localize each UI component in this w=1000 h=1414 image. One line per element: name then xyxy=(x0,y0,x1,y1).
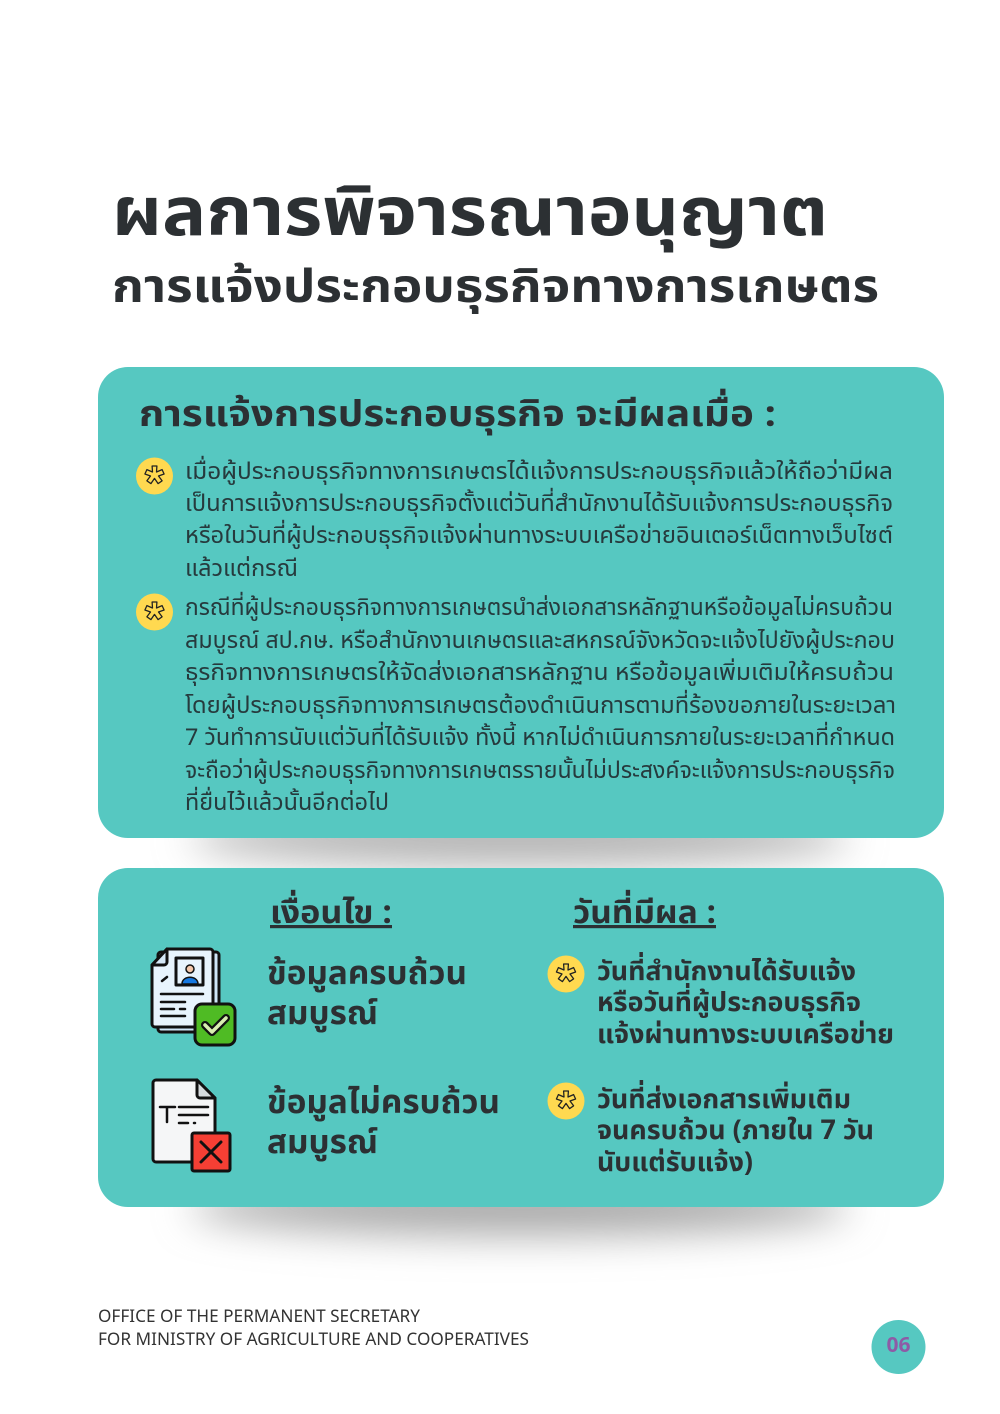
footer text: OFFICE OF THE PERMANENT SECRETARY xyxy=(98,1304,420,1330)
label: incomplete: ข้อมูลไม่ครบถ้วน xyxy=(267,1078,500,1128)
text block: date 2 xyxy=(597,1080,874,1184)
text block: date 2: วันที่ส่งเอกสารเพิ่มเติม xyxy=(597,1080,851,1121)
text block: paragraph 1: แล้วแต่กรณี xyxy=(185,553,298,587)
heading: effective date: วันที่มีผล : xyxy=(573,889,716,938)
icon: star bullet 3 xyxy=(548,956,584,992)
text block: paragraph 2: ธุรกิจทางการเกษตรให้จัดส่งเอกสารหลักฐาน หรือข้อมูลเพิ่มเติมให้ครบถ้วน xyxy=(185,657,894,691)
icon: star bullet 4 xyxy=(548,1082,584,1120)
panel: conditions and dates xyxy=(98,868,944,1207)
label: complete: ข้อมูลครบถ้วน xyxy=(267,949,467,999)
text block: date 1: แจ้งผ่านทางระบบเครือข่าย xyxy=(597,1015,894,1056)
text block: paragraph 2: 7 วันทำการนับแต่วันที่ได้รับแจ้ง ทั้งนี้ หากไม่ดำเนินการภายในระยะเวลาที่กำหนด xyxy=(185,721,895,756)
panel shadow xyxy=(190,1179,850,1235)
text block: paragraph 2: สมบูรณ์ สป.กษ. หรือสำนักงานเกษตรและสหกรณ์จังหวัดจะแจ้งไปยังผู้ประกอบ xyxy=(185,625,895,659)
footer text xyxy=(98,1304,529,1353)
text block: date 2: นับแต่รับแจ้ง) xyxy=(597,1143,753,1184)
footer text: FOR MINISTRY OF AGRICULTURE AND COOPERATIVES xyxy=(98,1327,529,1353)
text block: paragraph 1: เป็นการแจ้งการประกอบธุรกิจตั้งแต่วันที่สำนักงานได้รับแจ้งการประกอบธุรกิจ xyxy=(185,487,893,522)
panel shadow xyxy=(190,811,850,865)
text block: paragraph 2: โดยผู้ประกอบธุรกิจทางการเกษตรต้องดำเนินการตามที่ร้องขอภายในระยะเวลา xyxy=(185,689,896,724)
title: ผลการพิจารณาอนุญาต xyxy=(112,163,828,266)
icon: star bullet 2 xyxy=(136,594,173,630)
text block: paragraph 2: ที่ยื่นไว้แล้วนั้นอีกต่อไป xyxy=(185,786,389,821)
icon: incomplete document xyxy=(153,1080,230,1171)
text block: paragraph 2 xyxy=(185,591,896,821)
text block: paragraph 1: เมื่อผู้ประกอบธุรกิจทางการเกษตรได้แจ้งการประกอบธุรกิจแล้วให้ถือว่ามีผล xyxy=(185,455,893,490)
panel heading: การแจ้งการประกอบธุรกิจ จะมีผลเมื่อ : xyxy=(139,388,776,443)
text block: paragraph 2: กรณีที่ผู้ประกอบธุรกิจทางการเกษตรนำส่งเอกสารหลักฐานหรือข้อมูลไม่ครบถ้วน xyxy=(185,591,893,626)
icon: complete document xyxy=(152,949,235,1045)
text block: date 1: หรือวันที่ผู้ประกอบธุรกิจ xyxy=(597,983,861,1024)
label: incomplete xyxy=(267,1078,500,1168)
subtitle: การแจ้งประกอบธุรกิจทางการเกษตร xyxy=(112,253,879,323)
label: complete xyxy=(267,949,467,1039)
page number badge: 06 xyxy=(886,1331,911,1362)
panel: effective when xyxy=(98,367,944,838)
label: incomplete: สมบูรณ์ xyxy=(267,1118,378,1168)
page number badge xyxy=(872,1320,926,1374)
label: complete: สมบูรณ์ xyxy=(267,989,378,1039)
text block: date 1: วันที่สำนักงานได้รับแจ้ง xyxy=(597,952,856,993)
text block: date 2: จนครบถ้วน (ภายใน 7 วัน xyxy=(597,1111,874,1152)
text block: date 1 xyxy=(597,952,894,1056)
heading: conditions: เงื่อนไข : xyxy=(270,889,392,938)
text block: paragraph 2: จะถือว่าผู้ประกอบธุรกิจทางการเกษตรรายนั้นไม่ประสงค์จะแจ้งการประกอบธุรกิจ xyxy=(185,755,895,789)
icon: star bullet 1 xyxy=(136,458,173,494)
text block: paragraph 1: หรือในวันที่ผู้ประกอบธุรกิจแจ้งผ่านทางระบบเครือข่ายอินเตอร์เน็ตทางเว็บไซต์ xyxy=(185,519,893,554)
text block: paragraph 1 xyxy=(185,455,893,587)
